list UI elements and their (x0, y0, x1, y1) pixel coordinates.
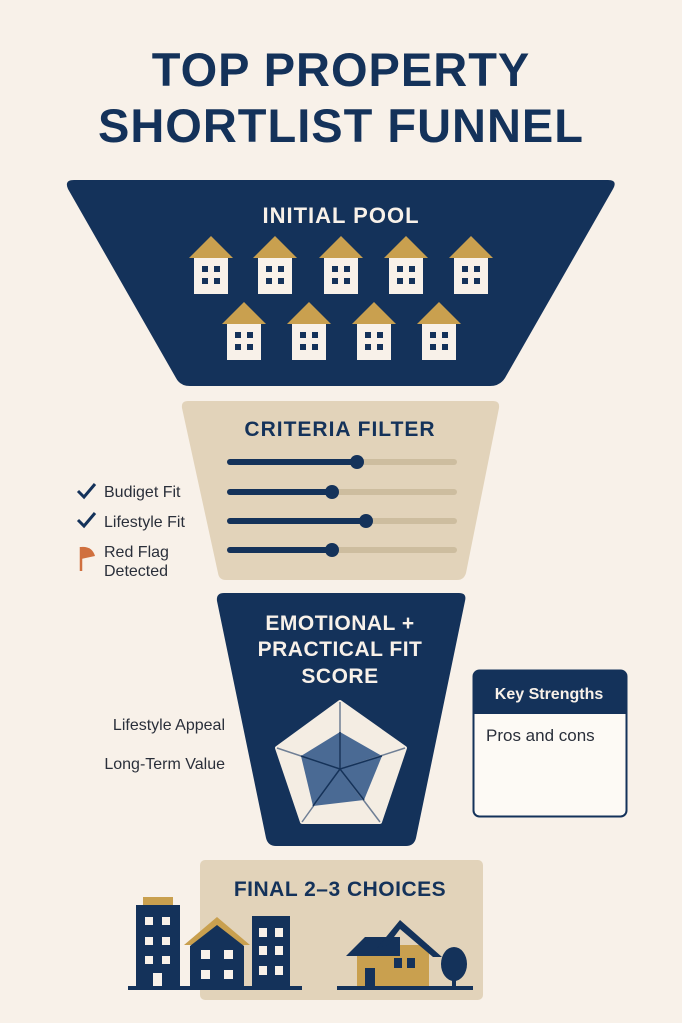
heading: PRACTICAL FIT (258, 638, 422, 661)
labels: radar (104, 717, 225, 773)
panel: initial pool (67, 180, 615, 386)
sliders (230, 455, 454, 557)
labels: radar: Lifestyle Appeal (113, 717, 225, 734)
title: SHORTLIST FUNNEL (98, 99, 584, 152)
heading: criteria filter: CRITERIA FILTER (244, 418, 436, 441)
title (98, 43, 584, 152)
checklist: Red Flag (104, 544, 169, 561)
radar chart (277, 702, 405, 822)
checklist: Lifestyle Fit (104, 514, 185, 531)
panel: emotional + practical fit (217, 593, 465, 846)
panel: key strengths: Pros and cons (486, 726, 595, 745)
checklist: Budiget Fit (104, 484, 181, 501)
panel: key strengths: Key Strengths (495, 686, 603, 703)
heading: SCORE (301, 665, 379, 688)
panel: key strengths (474, 670, 626, 816)
heading: initial pool: INITIAL POOL (262, 203, 420, 228)
panel: final choices (200, 860, 483, 1000)
icons: houses (189, 236, 493, 360)
panel: final choices: FINAL 2–3 CHOICES (234, 878, 446, 901)
icon: house with tree (337, 920, 473, 990)
title: TOP PROPERTY (152, 43, 530, 96)
icon: city buildings (128, 897, 302, 990)
heading (258, 612, 422, 688)
panel: criteria filter (182, 401, 499, 580)
checklist: Detected (104, 563, 168, 580)
heading: EMOTIONAL + (265, 612, 415, 635)
checklist (78, 484, 185, 580)
icon: red flag (81, 547, 95, 571)
labels: radar: Long-Term Value (104, 756, 225, 773)
